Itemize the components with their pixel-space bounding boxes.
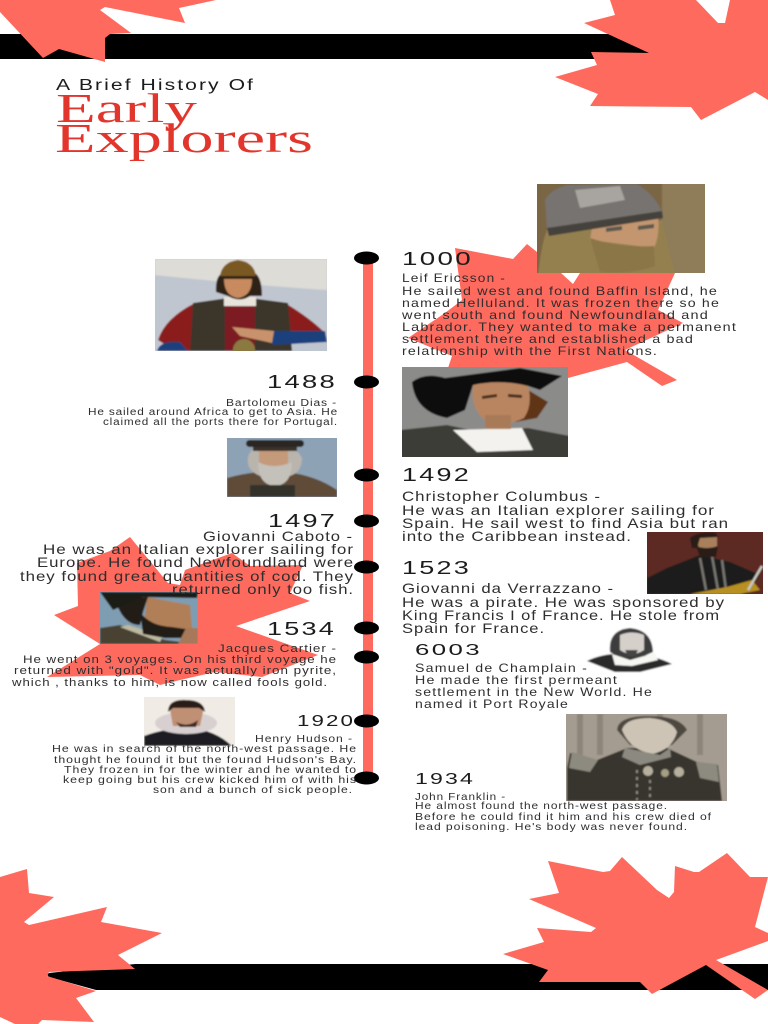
timeline marker: 1488 <box>354 376 379 388</box>
entry: 1920 Henry Hudson: 1920 <box>297 713 355 730</box>
entry: 6003 Samuel de Champlain: settlement in the New World. He <box>415 685 653 699</box>
maple leaf: top left <box>0 0 216 62</box>
timeline marker: 1523 <box>354 560 379 574</box>
entry: 1523 Giovanni da Verrazzano <box>402 558 725 636</box>
bottom black banner <box>48 964 768 990</box>
entry: 1497 Giovanni Caboto: He was an Italian explorer sailing for <box>43 541 354 557</box>
entry: 1534 Jacques Cartier: Jacques Cartier - <box>218 643 337 655</box>
entry: 1497 Giovanni Caboto: Europe. He found Newfoundland were <box>37 554 354 570</box>
entry: 1492 Christopher Columbus: Spain. He sail west to find Asia but ran <box>402 515 729 531</box>
entry: 1497 Giovanni Caboto: Giovanni Caboto - <box>203 528 353 544</box>
portrait: Giovanni da Verrazzano <box>645 530 765 596</box>
entry: 1000 Leif Ericsson: He sailed west and found Baffin Island, he <box>402 284 718 298</box>
entry: 1523 Giovanni da Verrazzano: King Francis I of France. He stole from <box>402 607 720 623</box>
entry: 1523 Giovanni da Verrazzano: Giovanni da Verrazzano - <box>402 580 614 596</box>
entry: 1497 Giovanni Caboto: they found great quantities of cod. They <box>20 568 354 584</box>
entry: 1934 John Franklin: He almost found the north-west passage. <box>415 800 668 812</box>
portrait: Christopher Columbus <box>400 365 570 459</box>
portrait: Giovanni Caboto <box>225 436 339 499</box>
maple leaf: bottom right <box>503 853 768 999</box>
entry: 1534 Jacques Cartier: returned with "gold". It was actually iron pyrite, <box>14 665 337 677</box>
timeline marker: 1920 <box>354 714 379 728</box>
timeline marker: 1934 <box>354 772 379 784</box>
entry: 1920 Henry Hudson: keep going but his crew kicked him of with his <box>63 774 357 786</box>
entry: 1934 John Franklin: Before he could find it him and his crew died of <box>415 811 712 823</box>
entry: 1934 John Franklin: John Franklin - <box>415 791 506 803</box>
maple leaf: top right <box>555 0 768 120</box>
title: Explorers: Explorers <box>55 115 313 161</box>
entry: 6003 Samuel de Champlain: named it Port Royale <box>415 697 569 711</box>
timeline marker: 1000 <box>354 252 379 264</box>
maple leaf: behind Giovanni Caboto and Jacques Cartier text <box>47 537 318 685</box>
entry: 1000 Leif Ericsson: 1000 <box>402 249 473 269</box>
entry: 1534 Jacques Cartier: 1534 <box>267 619 336 639</box>
entry: 1492 Christopher Columbus: Christopher Columbus - <box>402 488 601 504</box>
entry: 1000 Leif Ericsson: settlement there and established a bad <box>402 332 694 346</box>
entry: 1523 Giovanni da Verrazzano: Spain for France. <box>402 620 545 636</box>
portrait: Henry Hudson <box>144 697 235 746</box>
entry: 1920 Henry Hudson <box>52 713 357 796</box>
timeline axis <box>354 252 379 784</box>
entry: 1934 John Franklin: lead poisoning. He's body was never found. <box>415 821 688 833</box>
maple leaf: bottom left <box>0 869 162 1024</box>
timeline marker: 1492 <box>354 468 379 482</box>
entry: 1000 Leif Ericsson: went south and found Newfoundland and <box>401 308 709 322</box>
timeline marker: 6003 <box>354 650 379 664</box>
portrait: Jacques Cartier <box>100 592 198 644</box>
timeline marker: 1497 <box>354 514 379 528</box>
entry: 1492 Christopher Columbus: He was an Italian explorer sailing for <box>402 502 715 518</box>
entry: 1488 Bartolomeu Dias: He sailed around Africa to get to Asia. He <box>88 407 338 418</box>
top black banner <box>0 34 660 59</box>
entry: 1492 Christopher Columbus: 1492 <box>402 465 471 485</box>
entry: 1488 Bartolomeu Dias <box>88 372 338 428</box>
entry: 1497 Giovanni Caboto: returned only too fish. <box>172 581 354 597</box>
entry: 6003 Samuel de Champlain: Samuel de Champlain - <box>415 661 588 675</box>
entry: 6003 Samuel de Champlain: He made the first permeant <box>415 673 618 687</box>
entry: 1000 Leif Ericsson: relationship with the First Nations. <box>402 344 658 358</box>
entry: 1497 Giovanni Caboto: 1497 <box>268 511 337 531</box>
entry: 1523 Giovanni da Verrazzano: 1523 <box>402 558 471 578</box>
timeline marker: 1534 <box>354 622 379 634</box>
title kicker: A Brief History Of <box>56 77 255 94</box>
portrait: Samuel de Champlain <box>586 627 672 673</box>
entry: 1488 Bartolomeu Dias: Bartolomeu Dias - <box>226 398 337 409</box>
entry: 1497 Giovanni Caboto <box>20 511 354 597</box>
entry: 6003 Samuel de Champlain <box>415 642 653 711</box>
entry: 1000 Leif Ericsson: Labrador. They wanted to make a permanent <box>402 320 737 334</box>
entry: 1000 Leif Ericsson: named Helluland. It was frozen there so he <box>402 296 720 310</box>
portrait: Leif Ericsson <box>535 182 707 275</box>
entry: 1534 Jacques Cartier <box>11 619 337 689</box>
entry: 1523 Giovanni da Verrazzano: He was a pirate. He was sponsored by <box>402 594 725 610</box>
portrait: John Franklin <box>564 712 729 803</box>
entry: 1934 John Franklin <box>415 771 712 833</box>
entry: 1488 Bartolomeu Dias: claimed all the ports there for Portugal. <box>103 417 338 428</box>
entry: 1920 Henry Hudson: Henry Hudson - <box>255 733 353 745</box>
entry: 1934 John Franklin: 1934 <box>415 771 475 788</box>
portrait: Bartolomeu Dias <box>155 259 327 351</box>
maple leaf: behind Leif Ericsson text <box>408 244 683 386</box>
entry: 1492 Christopher Columbus: into the Caribbean instead. <box>402 528 632 544</box>
entry: 1920 Henry Hudson: son and a bunch of sick people. <box>153 784 353 796</box>
entry: 1920 Henry Hudson: He was in search of the north-west passage. He <box>52 743 357 755</box>
entry: 6003 Samuel de Champlain: 6003 <box>415 642 482 659</box>
entry: 1920 Henry Hudson: They frozen in for the winter and he wanted to <box>64 764 357 776</box>
entry: 1000 Leif Ericsson <box>401 249 737 358</box>
entry: 1920 Henry Hudson: thought he found it but the found Hudson's Bay. <box>54 754 357 766</box>
entry: 1492 Christopher Columbus <box>402 465 729 544</box>
entry: 1000 Leif Ericsson: Leif Ericsson - <box>402 271 506 285</box>
entry: 1488 Bartolomeu Dias: 1488 <box>267 372 337 392</box>
title <box>55 77 313 161</box>
entry: 1534 Jacques Cartier: He went on 3 voyages. On his third voyage he <box>23 654 337 666</box>
entry: 1534 Jacques Cartier: which , thanks to him, is now called fools gold. <box>11 677 328 689</box>
title: Early: Early <box>56 85 198 131</box>
